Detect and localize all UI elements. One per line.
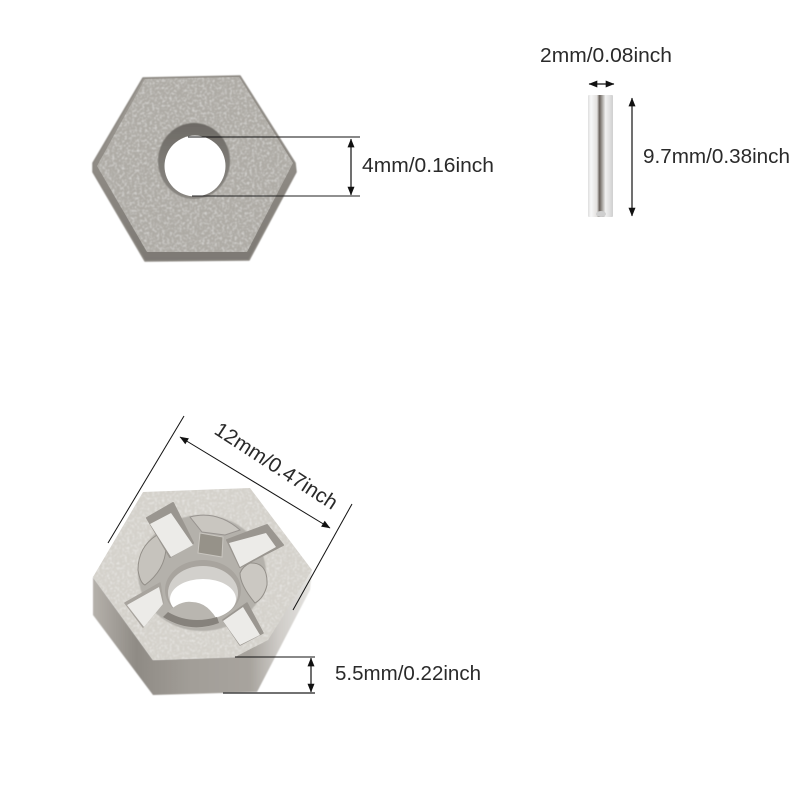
slot upper right xyxy=(227,525,283,567)
slot lower right xyxy=(223,603,263,645)
circular recess xyxy=(138,515,266,631)
hub and bore xyxy=(165,560,241,620)
nut top face xyxy=(93,488,312,660)
dimension: across flats xyxy=(108,416,352,610)
dimension: pin diameter: 2mm/0.08inch xyxy=(540,44,672,67)
right lens xyxy=(240,563,267,603)
dimension: across flats: 12mm/0.47inch xyxy=(210,418,342,515)
slot lower left xyxy=(125,583,163,627)
pin xyxy=(588,95,613,217)
hex nut, top view xyxy=(93,76,296,261)
dimension: pin diameter xyxy=(540,44,672,84)
centre web xyxy=(198,533,223,557)
dimension: pin length: 9.7mm/0.38inch xyxy=(643,145,790,168)
lower lens boss xyxy=(163,602,219,628)
dimension: nut height: 5.5mm/0.22inch xyxy=(335,662,481,685)
top lens xyxy=(190,515,240,535)
left lens xyxy=(138,535,166,585)
hex nut, underside view xyxy=(93,488,312,695)
nut side walls xyxy=(93,570,312,695)
dimension: hole diameter: 4mm/0.16inch xyxy=(362,154,494,177)
slot upper left xyxy=(147,503,193,557)
